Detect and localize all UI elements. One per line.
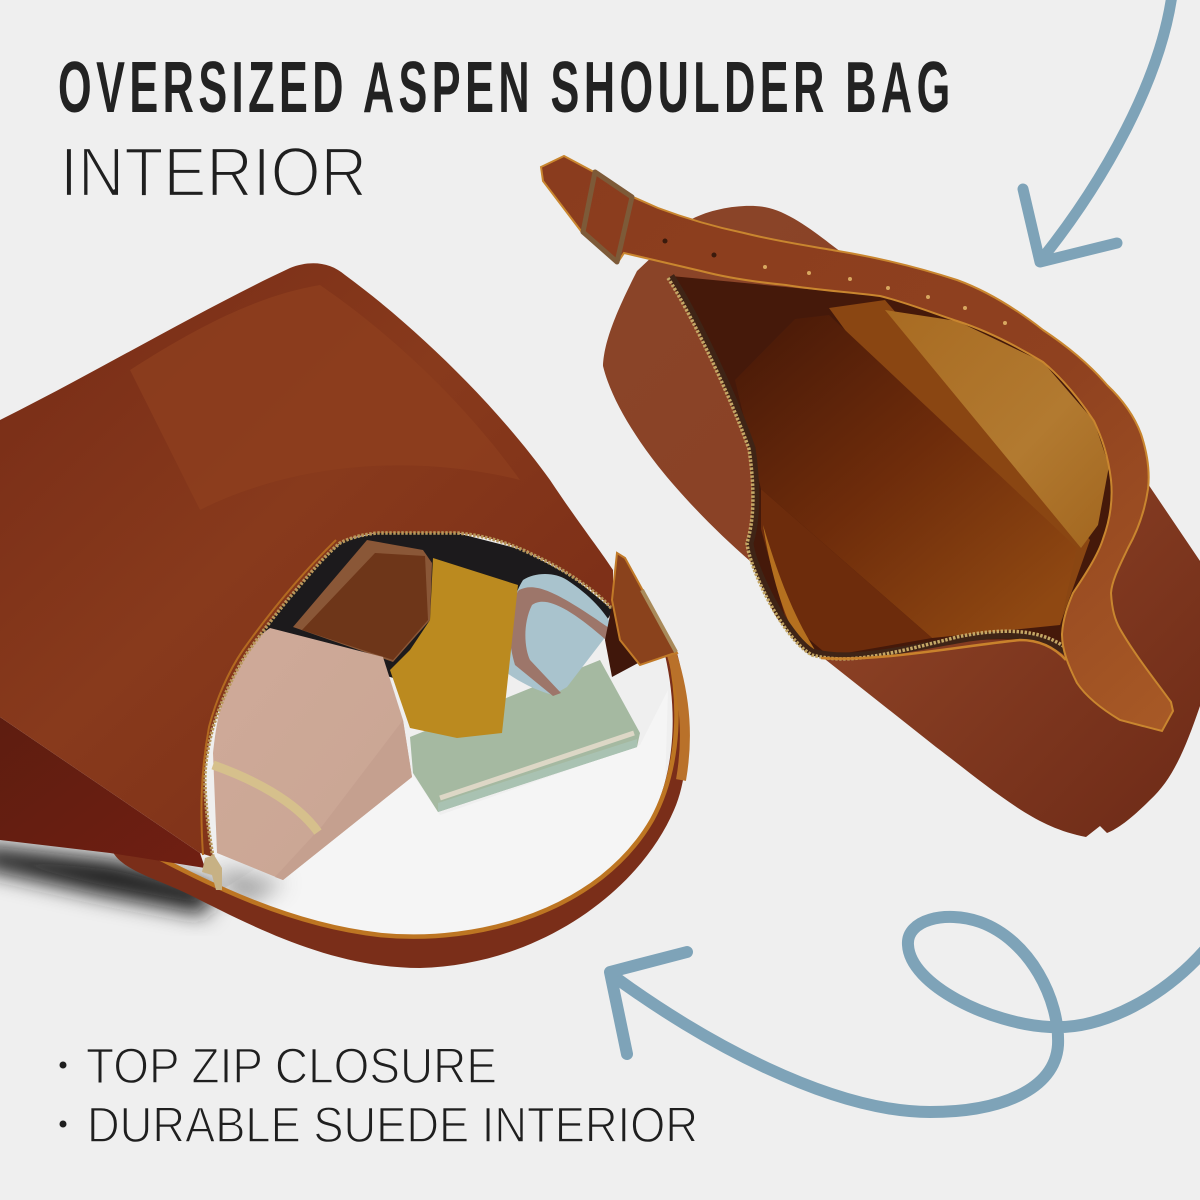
right bag interior [671,276,1125,658]
lower bag panel [0,717,205,868]
bullet: durable suede interior: DURABLE SUEDE INTERIOR [87,1097,698,1153]
mustard pouch [390,558,518,738]
zipper pull [202,855,222,890]
suede base panel [735,315,1077,638]
left bag: shoulder bag with contents [0,263,687,968]
green notebook [410,660,640,812]
right bag strap [541,156,1173,731]
floor shadow under pouch [222,868,285,905]
bag upper sheen [130,285,520,510]
suede orange sliver [763,525,815,650]
strap cut edge [114,655,676,937]
right bag: open shoulder bag [541,156,1200,837]
left bag buckle [605,553,677,677]
pink pouch side [275,720,412,880]
suede mid band [829,300,1090,625]
title: OVERSIZED ASPEN SHOULDER BAG [58,47,950,128]
ground shadow [0,845,215,915]
arrow: top right pointing to open bag [1023,0,1172,262]
subtitle: INTERIOR [60,133,367,211]
notebook lower cover [438,739,637,812]
buckle tab [612,553,677,665]
white floor inside strap [225,690,668,938]
right bag zipper [671,276,1066,656]
strap [112,653,687,968]
bottle strap [509,587,612,696]
bullet: top zip closure: TOP ZIP CLOSURE [86,1038,497,1094]
notebook page edge [440,733,634,798]
buckle metal [642,590,676,652]
left bag edge trim [201,540,336,855]
right bag front edge trim [821,640,1066,660]
suede lower front wall [761,489,932,656]
bag front leather [0,263,613,857]
suede back wall [885,310,1109,548]
zipper teeth [668,278,1066,659]
right bag outer leather [603,206,1200,837]
pink pouch zipper [213,765,318,832]
left bag zipper [205,533,613,857]
flap inner [302,553,428,660]
feature list [60,1038,698,1153]
blue bottle [507,574,613,695]
strap cut edge wide upper [672,655,685,780]
arrow: bottom looping to left bag [610,917,1200,1112]
pink pouch [213,628,412,880]
bag interior dark [230,533,613,680]
brown leather flap [293,540,432,662]
buckle shadow strap [605,600,640,677]
strap holes [662,238,1007,325]
right bag buckle [583,172,632,262]
